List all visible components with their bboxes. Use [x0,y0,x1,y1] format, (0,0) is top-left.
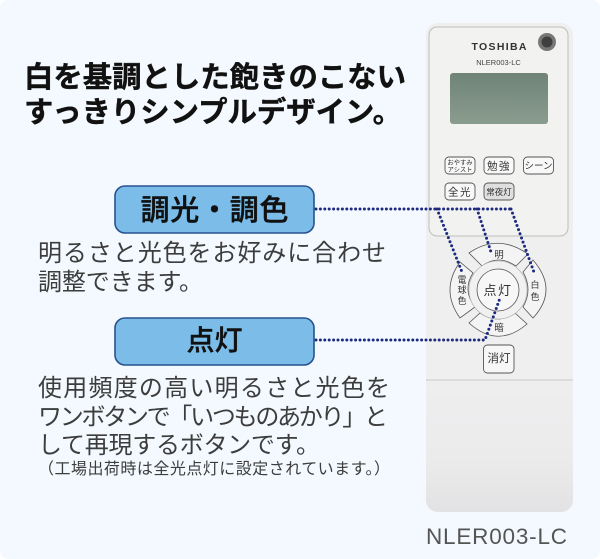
label: dimmer: 暗 [494,323,504,334]
LCD screen [450,73,548,124]
button: assist: アシスト [448,166,472,174]
model name: NLER003-LC [426,524,567,549]
dial pad: 点灯 [483,283,513,298]
text: dimming description: 調整できます。 [38,269,203,296]
top buttons [445,157,554,200]
label: warm: 色 [457,295,467,306]
label: warm [457,275,467,306]
text: dimming description: 明るさと光色をお好みに合わせ [38,240,386,267]
connector: dimming [316,209,535,275]
label: lighting: 点灯 [186,325,243,356]
label: lighting [115,318,314,365]
label: white: 白 [530,279,540,290]
text: lighting description [38,375,390,459]
text: lighting description: ワンボタンで「いつものあかり」と [38,404,388,431]
dial pad [450,243,546,336]
footnote: （工場出荷時は全光点灯に設定されています。） [38,460,390,478]
title: すっきりシンプルデザイン。 [24,95,402,129]
remote lower cover [426,380,573,512]
off button [484,345,514,373]
connector: lighting [316,298,500,340]
label: dimming: 調光・調色 [140,194,288,227]
button: full light: 全光 [448,186,472,198]
text: lighting description: して再現するボタンです。 [38,432,320,459]
brand logo: TOSHIBA [472,41,527,53]
remote body [426,23,573,512]
dial segments [450,243,546,336]
button: assist [445,157,475,174]
center button [469,261,527,319]
label: dimming [115,186,314,233]
button: assist: おやすみ [447,158,473,166]
title [24,61,406,129]
label: white: 色 [530,291,540,302]
button: scene: シーン [524,161,553,172]
remote control [426,23,573,512]
label: warm: 球 [457,284,467,295]
text: dimming description [38,240,386,296]
off button: 消灯 [488,351,511,365]
upper faceplate [429,27,568,236]
button: study: 勉強 [487,160,511,172]
label: white [530,279,540,302]
text: lighting description: 使用頻度の高い明るさと光色を [38,375,390,402]
label: warm: 電 [457,275,467,285]
title: 白を基調とした飽きのこない [24,61,406,94]
label: brighter: 明 [494,250,504,261]
badge icon [538,33,556,51]
model print: NLER003-LC [476,58,521,67]
button: night light: 常夜灯 [486,187,512,197]
